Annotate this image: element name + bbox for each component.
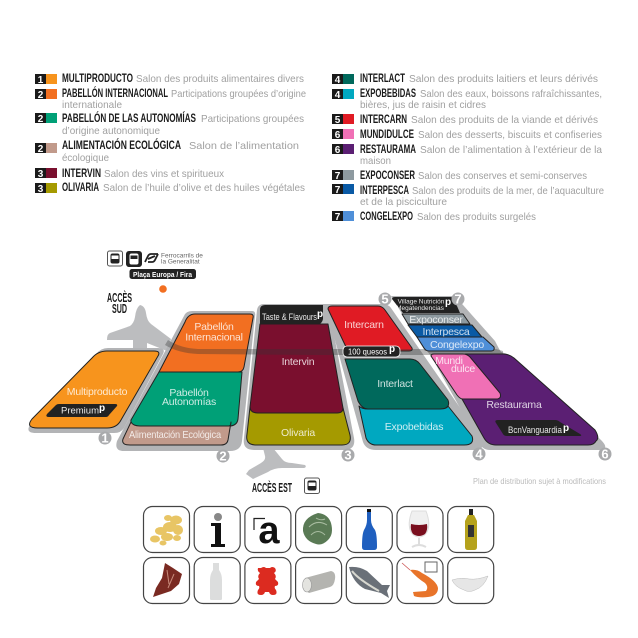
text: Ferrocarrils de la Generalitat: la Generalitat: [161, 258, 200, 266]
legend item: Congelexpo: [332, 211, 536, 223]
legend item: Expobebidas: EXPOBEBIDAS: [360, 88, 416, 100]
hall: Intercarn: Intercarn: [344, 319, 384, 331]
note: subject to modifications: Plan de distribution sujet à modifications: [473, 476, 606, 486]
legend: right column: [332, 73, 604, 223]
legend item: Interpesca: INTERPESCA: [360, 185, 409, 197]
tile: water bottle: [346, 506, 392, 552]
transport header: Plaça Europa / Fira: [108, 251, 203, 293]
hall: Pabellón Autonomías: Autonomías: [162, 396, 216, 408]
legend item: Alimentación Ecológica: [35, 139, 299, 164]
legend item: Restaurama: [332, 144, 602, 167]
hall number markers: [98, 292, 612, 464]
marker: 6: 6: [601, 446, 609, 462]
legend item: Pabellón Internacional: PABELLÓN INTERNACIONAL: [62, 87, 168, 100]
legend item: Intercarn: 5: [335, 115, 341, 126]
marker: 6: [598, 446, 612, 462]
marker: 1: [98, 430, 112, 446]
sponsor label: Premium: Premium: [61, 406, 99, 416]
legend item: Intervin: 3: [38, 169, 44, 180]
sponsor label: Premium: p: [99, 403, 105, 414]
legend item: Congelexpo: CONGELEXPO: [360, 211, 413, 223]
legend item: Expobebidas: bières, jus de raisin et cidres: [360, 99, 486, 111]
marker: 1: 1: [101, 430, 109, 446]
access label: Accès Sud: [107, 290, 132, 316]
hall: Interpesca: [408, 325, 482, 338]
marker: 3: [342, 448, 354, 462]
hall: Intervin: Intervin: [282, 356, 315, 368]
marker: 4: [472, 446, 486, 462]
sponsor label: BcnVanguardia: [495, 420, 581, 436]
sponsor label: Village Nutrición Megatendencias: Village Nutrición: [398, 298, 445, 306]
hall: Alimentación Ecológica: [123, 422, 231, 445]
legend item: Pabellón Internacional: 2: [38, 90, 44, 101]
marker: 7: [452, 292, 464, 306]
tile: wine glass: [397, 506, 443, 552]
marker: 4: 4: [475, 446, 483, 462]
legend item: Intervin: [35, 168, 225, 180]
text: Ferrocarrils de la Generalitat: Ferrocarrils de: [161, 252, 203, 260]
hall: Interlact: Interlact: [377, 378, 413, 390]
hall: Congelexpo: Congelexpo: [430, 339, 484, 351]
hall: Pabellón Internacional: [159, 314, 253, 372]
legend item: Congelexpo: Salon des produits surgelés: [417, 211, 536, 223]
legend item: Restaurama: RESTAURAMA: [360, 144, 416, 156]
tile: gummy bear: [245, 558, 291, 604]
hall: Intervin: [250, 324, 343, 413]
marker: 2: [216, 448, 230, 464]
legend item: Interpesca: [332, 184, 604, 208]
hall: Mundidulce: [431, 354, 500, 399]
hall: Restaurama: [462, 354, 598, 445]
hall: Expobebidas: Expobebidas: [385, 421, 443, 433]
legend item: Multiproducto: MULTIPRODUCTO: [62, 73, 133, 85]
legend item: Pabellón de las Autonomías: d’origine autonomique: [62, 125, 160, 137]
legend item: Interpesca: Salon des produits de la mer, de l’aquaculture: [412, 185, 604, 197]
sponsor label: Taste & Flavours: Taste & Flavours: [262, 312, 317, 322]
sponsor label: Village Nutrición Megatendencias: p: [445, 297, 451, 308]
legend item: Interpesca: 7: [335, 185, 341, 196]
sponsor label: Village Nutrición Megatendencias: Megatendencias: [396, 305, 445, 312]
tile: letter a: [245, 506, 291, 552]
tile: information: [194, 506, 240, 552]
hall: Pabellón Internacional: Pabellón: [194, 321, 234, 333]
tile: artichoke: [296, 506, 342, 552]
legend item: Interpesca: et de la pisciculture: [360, 196, 447, 208]
access label: Accès Sud: SUD: [112, 301, 127, 316]
hall: Pabellón Internacional: Internacional: [185, 332, 243, 344]
legend item: Pabellón de las Autonomías: [35, 112, 304, 137]
access road: south: [107, 305, 171, 353]
access label: Accès Sud: ACCÈS: [107, 290, 132, 305]
hall: Mundidulce: dulce: [451, 363, 475, 375]
legend item: Restaurama: Salon de l’alimentation à l’extérieur de la: [420, 144, 602, 156]
legend item: Mundidulce: 6: [335, 130, 341, 141]
legend: left column: [35, 73, 306, 195]
legend item: Alimentación Ecológica: 2: [38, 144, 44, 155]
legend item: Interlact: 4: [335, 75, 341, 86]
tile: tin can: [296, 558, 342, 604]
hall: Multiproducto: Multiproducto: [67, 386, 128, 398]
tile: milk bottle: [194, 558, 240, 604]
legend item: Mundidulce: Salon des desserts, biscuits et confiseries: [418, 129, 602, 141]
legend item: Intercarn: INTERCARN: [360, 114, 407, 126]
legend item: Pabellón Internacional: [35, 87, 306, 111]
legend item: Expoconser: 7: [335, 171, 341, 182]
legend item: Restaurama: maison: [360, 155, 391, 167]
legend item: Olivaria: [35, 182, 305, 195]
marker: 5: [378, 292, 392, 306]
sponsor label: 100 quesos: [343, 344, 400, 357]
legend item: Pabellón Internacional: internationale: [62, 99, 122, 111]
access road: east: [246, 448, 306, 479]
marker: 3: 3: [344, 448, 352, 462]
sponsor label: 100 quesos: 100 quesos: [348, 346, 387, 356]
hall: Expobebidas: [359, 406, 473, 445]
legend item: Pabellón de las Autonomías: 2: [38, 114, 44, 125]
marker: 7: 7: [454, 292, 462, 306]
icon: bus: [108, 251, 122, 266]
hall bases: [28, 296, 605, 451]
hall: Congelexpo: [417, 337, 494, 351]
sponsor label: BcnVanguardia: p: [563, 423, 569, 434]
tile: pasta: [144, 506, 190, 552]
legend item: Congelexpo: 7: [335, 212, 341, 223]
covered walkway band: [165, 340, 503, 355]
legend item: Olivaria: 3: [38, 184, 44, 195]
legend item: Alimentación Ecológica: écologique: [62, 152, 109, 164]
hall: Restaurama: Restaurama: [486, 399, 542, 411]
hall: Pabellón Autonomías: Pabellón: [169, 387, 209, 399]
legend item: Mundidulce: MUNDIDULCE: [360, 129, 414, 141]
legend item: Interlact: Salon des produits laitiers et leurs dérivés: [409, 73, 598, 85]
legend item: Pabellón de las Autonomías: PABELLÓN DE LAS AUTONOMÍAS: [62, 112, 196, 125]
tile: shrimp: [397, 558, 443, 604]
hall: Olivaria: Olivaria: [281, 427, 315, 439]
legend item: Interlact: [332, 73, 598, 86]
legend item: Expoconser: Salon des conserves et semi-conserves: [418, 170, 587, 182]
sponsor label: Village Nutrición Megatendencias: [392, 297, 460, 313]
legend item: Intervin: INTERVIN: [62, 168, 101, 180]
tile: white bowl: [448, 558, 494, 604]
tile: olive oil bottle: [448, 506, 494, 552]
legend item: Multiproducto: [35, 73, 304, 86]
legend item: Multiproducto: 1: [38, 75, 44, 86]
hall: Olivaria: [247, 407, 350, 445]
sponsor label: Premium: [46, 403, 117, 417]
marker: orange dot: [159, 285, 167, 293]
legend item: Multiproducto: Salon des produits alimentaires divers: [136, 73, 304, 85]
hall: Expoconser: Expoconser: [409, 314, 463, 326]
legend item: Expobebidas: 4: [335, 90, 341, 101]
hall: Intercarn: [328, 306, 412, 351]
legend item: Expobebidas: Salon des eaux, boissons rafraîchissantes,: [420, 88, 602, 100]
access label: Accès Est: ACCÈS EST: [252, 480, 292, 495]
hall: Mundidulce: Mundi: [435, 355, 463, 367]
legend item: Mundidulce: [332, 129, 602, 141]
tile: fish: [346, 558, 392, 604]
sponsor label: BcnVanguardia: BcnVanguardia: [508, 425, 562, 435]
legend item: Alimentación Ecológica: ALIMENTACIÓN ECOLÓGICA: [62, 139, 181, 152]
hall: Pabellón Autonomías: [131, 372, 242, 426]
sponsor label: Taste & Flavours: p: [317, 309, 323, 320]
hall: Interlact: [345, 359, 449, 409]
icon: FGC logo: [145, 254, 158, 262]
tile: letter a: a: [258, 510, 280, 552]
legend item: Restaurama: 6: [335, 145, 341, 156]
label: Plaça Europa/Fira: Plaça Europa / Fira: [133, 270, 193, 279]
icon: metro bus dark: [126, 251, 142, 267]
product icon grid: [144, 506, 494, 604]
legend item: Interlact: INTERLACT: [360, 73, 405, 85]
legend item: Expobebidas: [332, 88, 602, 111]
legend item: Olivaria: OLIVARIA: [62, 182, 99, 194]
marker: 2: 2: [219, 448, 227, 464]
sponsor label: Taste & Flavours: [260, 305, 323, 324]
legend item: Intervin: Salon des vins et spiritueux: [104, 168, 225, 180]
legend item: Expoconser: [332, 170, 587, 182]
legend item: Expoconser: EXPOCONSER: [360, 170, 415, 182]
hall: Alimentación Ecológica: Alimentación Ecológica: [129, 429, 221, 441]
legend item: Intercarn: [332, 114, 598, 126]
tile: cured meat: [144, 558, 190, 604]
legend item: Pabellón de las Autonomías: Participations groupées: [201, 113, 304, 125]
legend item: Olivaria: Salon de l’huile d’olive et des huiles végétales: [103, 182, 305, 194]
legend item: Intercarn: Salon des produits de la viande et dérivés: [411, 114, 598, 126]
hall: Interpesca: Interpesca: [422, 326, 470, 338]
hall: Multiproducto: [30, 351, 159, 428]
sponsor label: 100 quesos: p: [389, 344, 395, 355]
icon: bus east: [304, 478, 320, 494]
legend item: Alimentación Ecológica: Salon de l’alimentation: [189, 140, 299, 152]
legend item: Pabellón Internacional: Participations groupées d’origine: [171, 88, 306, 100]
marker: 5: 5: [381, 292, 389, 306]
